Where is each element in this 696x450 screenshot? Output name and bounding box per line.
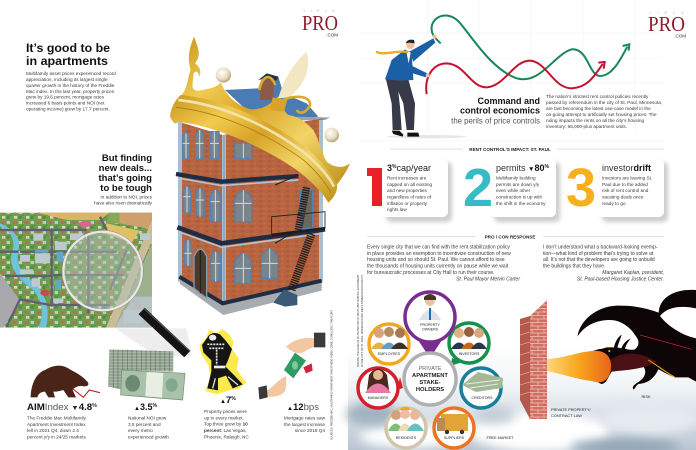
stat: NOI: experienced growth: [128, 434, 169, 440]
window mullions: [183, 130, 278, 283]
source note: right page: [356, 275, 364, 367]
crown fleur: [278, 52, 308, 98]
quote: Margaret Kaplan: Margaret Kaplan, president,: [602, 270, 664, 276]
node: managers: MANAGERS: [368, 396, 389, 400]
text block: apartments intro: increased 6 basis points and NOI (net: [26, 100, 105, 106]
quote: St. Paul Mayor: for bureaucratic processes at City Hall to run their course.: [367, 270, 495, 276]
node: residents: RESIDENTS: [396, 436, 417, 440]
dragon fire: [547, 351, 611, 382]
node: suppliers: SUPPLIERS: [444, 436, 465, 440]
label: free market: FREE MARKET: [486, 436, 514, 440]
panel: investor drift: investordrift: [602, 163, 651, 173]
entry steps: [273, 289, 297, 307]
stat: NOI: National NOI grew: [128, 416, 167, 420]
logo: Yield Pro right page: YIELD: [649, 10, 684, 15]
text block: apartments intro: operating income) grew by 17.7 percent.: [26, 106, 110, 112]
quote: Margaret Kaplan: St. Paul-based Housing Justice Center.: [577, 276, 664, 282]
text block: rent control intro: inventory: 65,000-plus apartment units.: [546, 124, 627, 129]
label: private property / contract law: [551, 407, 591, 418]
text block: rent control intro: passed by referendum in the city of St. Paul, Minnesota,: [546, 100, 662, 105]
panel: 3% cap per year: cap/year: [396, 163, 431, 173]
heading: It's good to be in apartments: It’s good to be: [26, 41, 110, 55]
stat: NOI: ▲3.5: [134, 402, 152, 412]
logo: Yield Pro left page: PRO: [302, 11, 338, 35]
text block: rent control intro: ruling impacts the rents on all the city’s housing: [546, 118, 645, 123]
node: employees: EMPLOYEES: [378, 352, 401, 356]
hub: private apartment stakeholders: [404, 353, 456, 405]
text block: rent control intro: are fast becoming the latest use-case model in the: [546, 106, 651, 111]
stat: mortgage rates: ▲12bps: [287, 402, 319, 413]
panel: 3% cap per year: 3: [387, 163, 392, 173]
node: residents: [386, 407, 426, 448]
panel: permits down 80%: Multifamily building: [496, 176, 536, 180]
node: employees: [369, 324, 409, 364]
panel: permits down 80%: permits are down y/y: [496, 182, 540, 187]
stat: property prices: Top three grew by 10: [204, 422, 248, 426]
stat: AIM Index: %: [92, 403, 98, 409]
quote: St. Paul Mayor: Every single city that we can find with the rent stabilization policy: [367, 244, 510, 250]
panel: permits down 80%: even while other: [496, 188, 531, 193]
quote: Margaret Kaplan: I don’t understand what a backward-looking exemp-: [543, 244, 658, 250]
label: private property / contract law: CONTRACT LAW: [551, 413, 582, 418]
stat: property prices: [204, 395, 249, 440]
quote: St. Paul Mayor: [367, 244, 520, 282]
stat: NOI: [128, 402, 169, 440]
brick walls: [178, 122, 223, 310]
text block: apartments intro: grew by 19.6 percent, mortgage rates: [26, 94, 105, 100]
logo: Yield Pro left page: .COM: [326, 32, 338, 38]
icon: shocked skeleton: [199, 329, 246, 394]
stat: property prices: up in every market.: [204, 416, 244, 420]
illustration: brick wall: [520, 300, 547, 419]
text block: apartments intro: appreciation, including its largest single: [26, 77, 108, 82]
icon: magnifying glass: [60, 227, 190, 354]
fire escape: [272, 175, 325, 290]
node: property owners: OWNERS: [422, 328, 439, 332]
logo: Yield Pro left page: YIELD: [303, 8, 335, 13]
heading: Command and control economics: Command and: [477, 96, 540, 106]
text block: prices risen: have also risen dramatically: [94, 200, 153, 206]
stat: property prices: %: [231, 396, 236, 402]
hub: private apartment stakeholders: STAKE-: [419, 380, 441, 386]
icon: hands exchanging money: [258, 333, 325, 399]
logo: Yield Pro right page: PRO: [648, 12, 685, 36]
panel: permits down 80%: the shift in the economy: [496, 201, 546, 206]
quote: St. Paul Mayor: the thousands of housing units currently on pause while we wait: [367, 264, 509, 270]
text block: rent control intro: on-going attempt to artificially set housing prices. The: [546, 112, 657, 117]
roof and chimney: [225, 77, 318, 122]
stat: AIM Index: AIMIndex ▼4.8: [27, 402, 91, 412]
quote: Margaret Kaplan: tion—what kind of problem that’s trying to solve at: [543, 251, 654, 257]
heading: It's good to be in apartments: [26, 41, 110, 68]
quote: Margaret Kaplan: the buildings that they have.: [543, 264, 605, 270]
stat: NOI: 3.5 percent and: [128, 422, 161, 427]
heading: But finding new deals: to be tough: [100, 183, 152, 194]
stat: mortgage rates: [284, 402, 326, 433]
stat: mortgage rates: since 2018 Q4: [295, 428, 325, 433]
text block: apartments intro: [26, 71, 116, 112]
panel: permits down 80%: construction is up with: [496, 194, 543, 200]
panel: permits down 80%: 2: [463, 158, 493, 218]
node: investors: [449, 323, 489, 366]
door: [194, 249, 207, 298]
panel: 3% cap per year: capped on all existing: [387, 182, 432, 187]
panel: 3% cap per year: inflation or property: [387, 201, 428, 206]
background: cloud sky on right page: [346, 345, 696, 450]
quote: St. Paul Mayor: housing units and so should St. Paul. We cannot afford to lose: [367, 257, 505, 263]
heading: But finding new deals: new deals...: [99, 163, 152, 174]
text block: prices risen: In addition to NOI, prices: [100, 194, 153, 200]
panel: 3% cap per year: [367, 158, 452, 222]
label: risk: RISK: [641, 394, 651, 399]
panel: permits down 80%: %: [544, 164, 549, 170]
heading: Command and control economics: [451, 96, 540, 126]
panel: investor drift: [566, 158, 668, 222]
magnifier shadow: [115, 328, 192, 357]
text block: apartments intro: Mac index. In the last year, property prices: [26, 89, 115, 94]
quote: Margaret Kaplan: all. It’s not that the developers are going to unbuild: [543, 257, 655, 263]
node: property owners: PROPERTY: [420, 323, 440, 327]
heading: But finding new deals: that’s going: [99, 173, 152, 184]
panel: investor drift: Investors are leaving St.: [602, 176, 652, 180]
panel: 3% cap per year: Rent increases are: [387, 176, 427, 180]
stat: mortgage rates: Mortgage rates saw: [284, 416, 326, 420]
chart: green and red price curves: [426, 16, 629, 94]
heading: It's good to be in apartments: in apartments: [26, 54, 108, 68]
label: private property / contract law: PRIVATE PROPERTY/: [551, 407, 591, 412]
stat: AIM Index: Apartment Investment Index: [27, 422, 86, 427]
text block: apartments intro: Multifamily asset prices experienced record: [26, 71, 116, 76]
text block: rent control intro: The nation’s strictest rent control policies recently: [546, 94, 649, 99]
hub: private apartment stakeholders: PRIVATE: [419, 366, 442, 372]
panel: permits down 80%: permits ▼80: [496, 163, 544, 173]
crown points and waves: [181, 37, 350, 185]
node: managers: [358, 368, 403, 408]
heading: But finding new deals: But finding: [102, 153, 152, 164]
icon: money stacks: [108, 349, 185, 400]
stat: property prices: Phoenix, Raleigh, NC: [204, 434, 249, 440]
stat: NOI: %: [152, 403, 157, 409]
crown pearls: [216, 67, 231, 83]
windows: [183, 130, 313, 283]
stat: AIM Index: [27, 402, 98, 440]
stat: AIM Index: percent y/y in 24/25 markets: [27, 434, 87, 440]
node: suppliers: [434, 408, 474, 448]
quote: Margaret Kaplan: [543, 244, 664, 282]
text block: apartments intro: quarter growth in the history of the Freddie: [26, 83, 115, 88]
crown band: [170, 95, 337, 203]
hub: private apartment stakeholders: HOLDERS: [416, 387, 444, 393]
stat: property prices: ▲7: [220, 395, 231, 406]
text block: rent control intro: [546, 94, 662, 129]
panel: investor drift: vacating deals once: [602, 194, 644, 200]
hub: private apartment stakeholders: APARTMENT: [412, 373, 448, 379]
panel: investor drift: 3: [566, 158, 596, 218]
panel: investor drift: ready to go: [602, 201, 626, 206]
source note: right page: SOURCE: THE RESULTS OF AN ANALYSIS OF MULTI-UNIT CONTROL EXPERIMENT: [356, 275, 360, 367]
panel: 3% cap per year: %: [392, 164, 397, 170]
foundation: [179, 277, 322, 315]
section heading: rent control's impact: RENT CONTROL’S IMPACT: ST. PAUL: [469, 147, 551, 152]
illustration: dragon breathing fire: [577, 290, 696, 389]
grid lines behind chart: [360, 0, 664, 141]
stat: NOI: every metro: [128, 428, 153, 433]
map illustration with magnifying glass: [0, 213, 192, 357]
node: investors: INVESTORS: [459, 352, 480, 356]
panel: permits down 80%: [463, 158, 560, 222]
source note: right page: IN THE CITY OF ST. PAUL, MINNESOTA AND RENT STABILIZATION POLICY: [360, 275, 364, 367]
illustration: businessman with whip curves: [376, 35, 467, 138]
panel: 3% cap per year: rights law: [387, 207, 407, 212]
node: property owners: [405, 292, 455, 352]
heading: Command and control economics: control economics: [460, 106, 540, 116]
node: creditors: [461, 368, 503, 408]
node: creditors: CREDITORS: [471, 396, 493, 400]
text block: prices risen: [94, 194, 153, 206]
corner pillars: [180, 120, 321, 310]
section heading: pro / con response: PRO / CON RESPONSE: [485, 234, 535, 240]
panel: investor drift: Paul due to the added: [602, 182, 648, 187]
panel: 3% cap per year: and new properties: [387, 188, 428, 193]
stat: property prices: Property prices were: [204, 409, 247, 414]
stat: AIM Index: fell in 2021 Q4, down 2.4: [27, 428, 79, 433]
panel: investor drift: risk of rent control and: [602, 188, 649, 193]
panel: 3% cap per year: regardless of rates of: [387, 194, 432, 200]
heading: But finding new deals: [99, 153, 152, 194]
stat: mortgage rates: the largest increase: [284, 422, 325, 427]
source note: left page: SOURCES: FREDDIE MAC, MULTIFAMILY APARTMENT INVESTMENT INDEX, CBRE, CORELOGIC, TREASURY: [330, 310, 334, 440]
icon: bear market: [31, 366, 100, 397]
quote: St. Paul Mayor: St. Paul Mayor Melvin Carter: [456, 276, 520, 282]
building illustration: [176, 73, 330, 315]
stat: property prices: percent: Las Vegas,: [204, 428, 247, 433]
quote: St. Paul Mayor: in place provides an exemption to incentivize construction of new: [367, 251, 511, 257]
logo: Yield Pro right page: .COM: [674, 34, 686, 38]
crown illustration: [170, 37, 350, 203]
heading: Command and control economics: the perils of price controls: [451, 116, 540, 126]
diagram: private apartment stakeholders: [358, 292, 503, 448]
stat: AIM Index: The Freddie Mac Multifamily: [27, 416, 87, 420]
floor cornices: [176, 174, 298, 182]
